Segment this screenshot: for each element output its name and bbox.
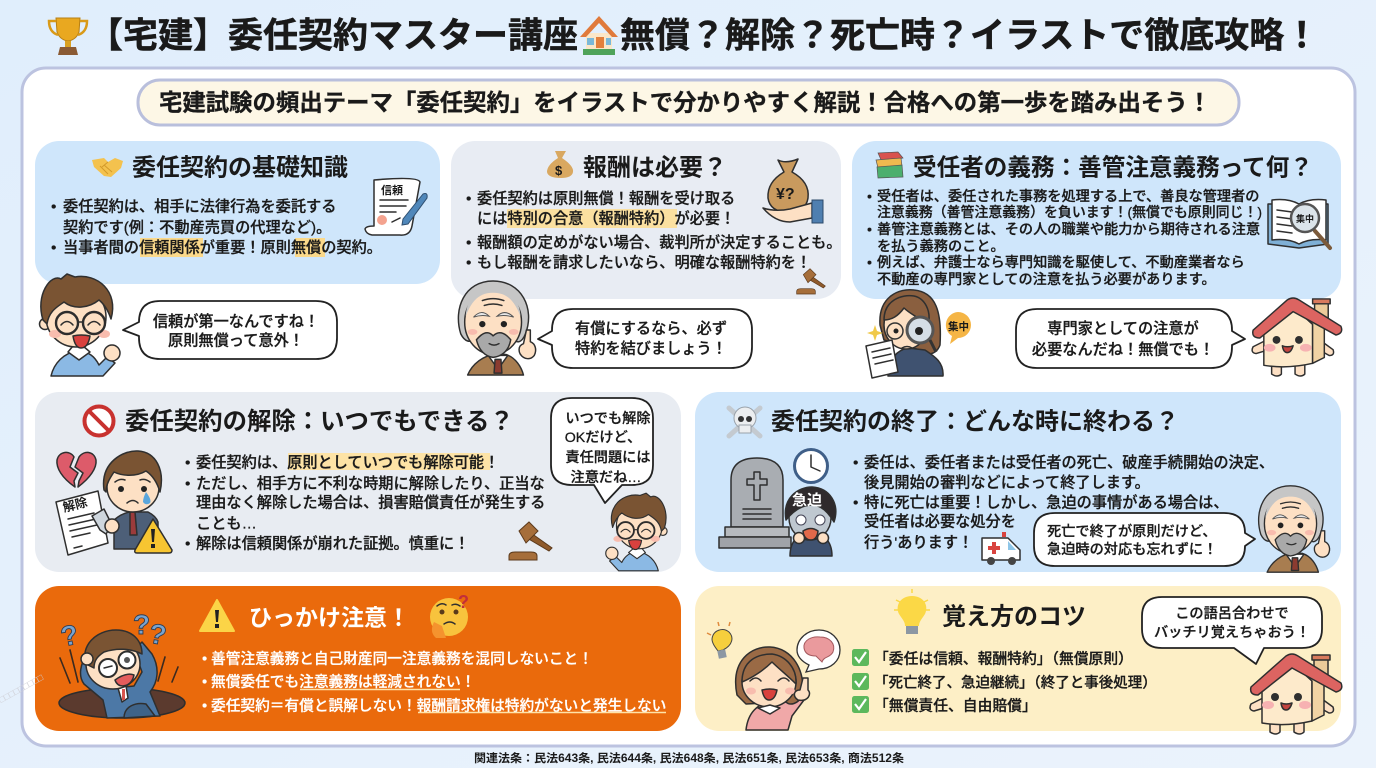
- character: elderly teacher: [1259, 486, 1330, 572]
- body text: •: [202, 698, 207, 714]
- highlight: [507, 209, 677, 228]
- body text: 解除は信頼関係が崩れた証拠。慎重に！: [196, 534, 469, 552]
- icon: small bulb: [707, 622, 732, 659]
- speech bubble: [551, 398, 653, 503]
- character: woman with magnifier: [866, 290, 971, 378]
- panel: is compensation needed: [451, 141, 842, 375]
- body text: 理由なく解除した場合は、損害賠償責任が発生する: [196, 494, 545, 512]
- body text: 行う'あります！: [864, 534, 973, 552]
- title: [49, 16, 1319, 56]
- icon: gavel: [797, 269, 825, 294]
- body text: [853, 454, 1274, 552]
- icon: money bag emoji: [547, 151, 573, 178]
- character: house: [1250, 654, 1342, 734]
- body text: 委任契約は、相手に法律行為を委託する: [63, 198, 336, 216]
- icon: cancellation document: 解除: [61, 494, 89, 515]
- character: man stuck in a hole: ?: [58, 619, 81, 653]
- icon: warning triangle: [135, 519, 172, 553]
- body text: •: [867, 255, 872, 271]
- icon: book and magnifier: [1268, 200, 1330, 248]
- heading: 報酬は必要？: [583, 154, 727, 182]
- body text: には特別の合意（報酬特約）が必要！: [477, 210, 735, 228]
- body text: 当事者間の信頼関係が重要！原則無償の契約。: [63, 238, 382, 256]
- icon: contract scroll and pen: [365, 178, 427, 235]
- checklist text: [874, 650, 1157, 714]
- body text: 特に死亡は重要！しかし、急迫の事情がある場合は、: [864, 494, 1228, 512]
- body text: 後見開始の審判などによって終了します。: [864, 474, 1150, 492]
- body text: を払う義務のこと。: [877, 238, 1005, 255]
- body text: •: [51, 240, 56, 256]
- body text: [202, 650, 666, 714]
- speech bubble: 特約を結びましょう！: [575, 340, 727, 358]
- body text: •: [466, 234, 471, 252]
- checklist: [852, 649, 1157, 714]
- icon: thinking face: [430, 592, 469, 638]
- icon: broken heart: [57, 452, 96, 487]
- body text: •: [185, 454, 190, 472]
- subtitle banner: 宅建試験の頻出テーマ「委任契約」をイラストで分かりやすく解説！合格への第一歩を踏み出そう！: [159, 90, 1211, 116]
- speech bubble: [1142, 597, 1322, 664]
- body text: [867, 188, 1262, 288]
- body text: もし報酬を請求したいなら、明確な報酬特約を！: [477, 254, 811, 272]
- icon: ambulance: [982, 532, 1020, 565]
- body text: 委任契約＝有償と誤解しない！報酬請求権は特約がないと発生しない: [211, 696, 666, 714]
- speech bubble: いつでも解除: [565, 410, 651, 427]
- character: man stuck in a hole: [58, 609, 185, 718]
- icon: brain thought bubble: [797, 630, 840, 672]
- body text: 委任は、委任者または受任者の死亡、破産手続開始の決定、: [864, 454, 1274, 472]
- panel: end of mandate: [695, 392, 1341, 572]
- body text: 注意義務（善管注意義務）を負います！(無償でも原則同じ！): [877, 204, 1262, 221]
- speech bubble: [123, 301, 337, 359]
- icon: light bulb: [894, 589, 930, 634]
- footer: related articles: 関連法条：民法643条, 民法644条, 民法648条, 民法651条, 民法653条, 商法512条: [474, 751, 904, 765]
- body text: •: [51, 198, 56, 216]
- body text: 善管注意義務とは、その人の職業や能力から期待される注意: [877, 221, 1260, 238]
- body text: 例えば、弁護士なら専門知識を駆使して、不動産業者なら: [877, 254, 1245, 271]
- speech bubble: 注意だね…: [571, 469, 641, 486]
- panel: basics of mandate contract: [35, 141, 440, 376]
- body text: 受任者は、委任された事務を処理する上で、善良な管理者の: [877, 188, 1260, 205]
- body text: •: [202, 674, 207, 690]
- body text: 受任者は必要な処分を: [864, 512, 1016, 530]
- character: house: [1252, 298, 1342, 376]
- body text: •: [185, 536, 190, 552]
- heading: 受任者の義務：善管注意義務って何？: [913, 154, 1313, 182]
- speech bubble: [538, 309, 752, 368]
- speech bubble: 専門家としての注意が: [1047, 320, 1199, 338]
- character: woman with magnifier: 集中: [948, 320, 969, 333]
- body text: 委任契約は原則無償！報酬を受け取る: [477, 190, 735, 208]
- speech bubble: 信頼が第一なんですね！: [153, 312, 319, 330]
- icon: cancellation document: [56, 491, 119, 555]
- speech bubble: OKだけど、: [565, 430, 641, 446]
- subtitle banner: [138, 80, 1239, 125]
- heading: 委任契約の基礎知識: [132, 154, 348, 182]
- panel: memory tips: [695, 586, 1342, 734]
- heading: 委任契約の終了：どんな時に終わる？: [771, 408, 1179, 436]
- heading: 委任契約の解除：いつでもできる？: [125, 408, 514, 436]
- checklist text: 「委任は信頼、報酬特約」（無償原則）: [874, 650, 1133, 668]
- icon: books: [876, 152, 903, 178]
- warning mark: [151, 529, 155, 548]
- icon: yen money bag on hand: ¥?: [776, 186, 795, 203]
- checklist text: 「無償責任、自由賠償」: [874, 698, 1037, 714]
- character: worried man: [104, 451, 161, 549]
- icon: trophy: [49, 18, 87, 55]
- body text: ただし、相手方に不利な時期に解除したり、正当な: [196, 476, 545, 492]
- body text: 委任契約は、原則としていつでも解除可能！: [196, 454, 499, 472]
- speech bubble: 有償にするなら、必ず: [575, 320, 727, 338]
- speech bubble: 責任問題には: [565, 450, 651, 466]
- icon: contract scroll and pen: 信頼: [381, 183, 403, 197]
- panel: duties of the mandatary: [852, 141, 1342, 378]
- body text: •: [466, 254, 471, 272]
- icon: prohibited sign: [84, 406, 114, 436]
- icon: clock: [794, 450, 828, 482]
- body text: 無償委任でも注意義務は軽減されない！: [211, 674, 475, 690]
- body text: 報酬額の定めがない場合、裁判所が決定することも。: [477, 234, 842, 252]
- speech bubble: 急迫時の対応も忘れずに！: [1047, 541, 1217, 558]
- body text: [51, 198, 382, 256]
- speech bubble: バッチリ覚えちゃおう！: [1154, 625, 1310, 641]
- body text: 善管注意義務と自己財産同一注意義務を混同しないこと！: [211, 650, 593, 668]
- body text: •: [853, 494, 858, 512]
- body text: •: [185, 476, 190, 492]
- body text: •: [853, 454, 858, 472]
- icon: skull and crossbones: [729, 407, 760, 436]
- panel: termination by party: [35, 392, 681, 572]
- speech bubble: [1034, 513, 1255, 566]
- body text: 契約です(例：不動産売買の代理など)。: [63, 220, 331, 236]
- highlights: [140, 238, 325, 257]
- icon: handshake: [92, 158, 123, 177]
- character: elderly teacher: [458, 281, 536, 375]
- icon: warning: [200, 600, 234, 631]
- icon: gavel: [509, 522, 552, 560]
- icon: gravestone: [719, 458, 791, 548]
- character: panicked person: [785, 487, 836, 556]
- body text: •: [867, 189, 872, 205]
- icon: money bag emoji: $: [555, 163, 563, 178]
- speech bubble: [1016, 309, 1245, 368]
- body text: [185, 454, 545, 552]
- underlines: [300, 690, 666, 712]
- character: girl with idea: [736, 647, 810, 730]
- character: boy: [40, 274, 120, 376]
- body text: •: [867, 222, 872, 238]
- speech bubble: 死亡で終了が原則だけど、: [1047, 523, 1217, 540]
- icon: book and magnifier: 集中: [1296, 213, 1314, 224]
- character: panicked person: 急迫: [792, 491, 822, 509]
- icon: yen money bag on hand: [763, 159, 823, 223]
- check icons: [852, 649, 869, 713]
- heading: 覚え方のコツ: [942, 604, 1086, 630]
- title: 【宅建】委任契約マスター講座: [88, 16, 578, 56]
- title: 無償？解除？死亡時？イラストで徹底攻略！: [620, 16, 1319, 56]
- body text: ことも…: [196, 516, 257, 532]
- speech bubble: この語呂合わせで: [1175, 606, 1289, 622]
- heading: ひっかけ注意！: [249, 604, 410, 630]
- character: boy pointing: [606, 493, 667, 571]
- icon: house emoji: [580, 16, 618, 55]
- speech bubble: 原則無償って意外！: [168, 332, 304, 350]
- body text: [466, 190, 842, 272]
- checklist text: 「死亡終了、急迫継続」（終了と事後処理）: [874, 674, 1157, 692]
- character: man stuck in a hole: ?: [133, 609, 150, 640]
- character: man stuck in a hole: ?: [147, 618, 169, 651]
- panel: tricky points: [0, 586, 681, 731]
- highlight: [288, 453, 490, 470]
- speech bubble: 必要なんだね！無償でも！: [1032, 342, 1214, 358]
- body text: •: [466, 190, 471, 208]
- body text: •: [202, 652, 207, 668]
- body text: 不動産の専門家としての注意を払う必要があります。: [877, 271, 1216, 288]
- icon: thinking face: ?: [458, 592, 469, 612]
